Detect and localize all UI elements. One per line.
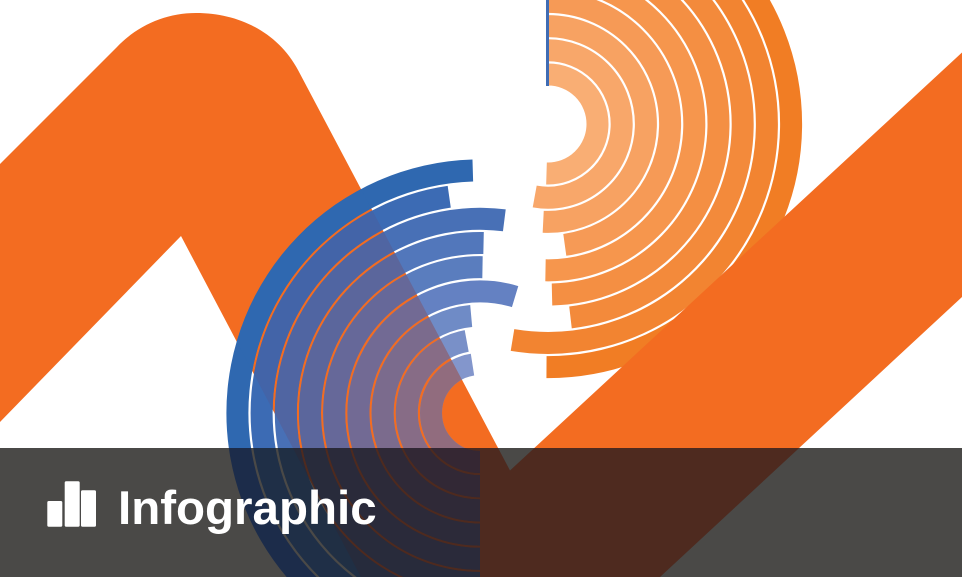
banner: dark strip [0,448,962,577]
radial chart: orange half rings [512,0,791,367]
radial chart: blue half rings [226,160,515,577]
icon: bar chart [47,481,96,527]
title: Infographic: Infographic [118,482,377,535]
blue axis line [546,0,549,86]
